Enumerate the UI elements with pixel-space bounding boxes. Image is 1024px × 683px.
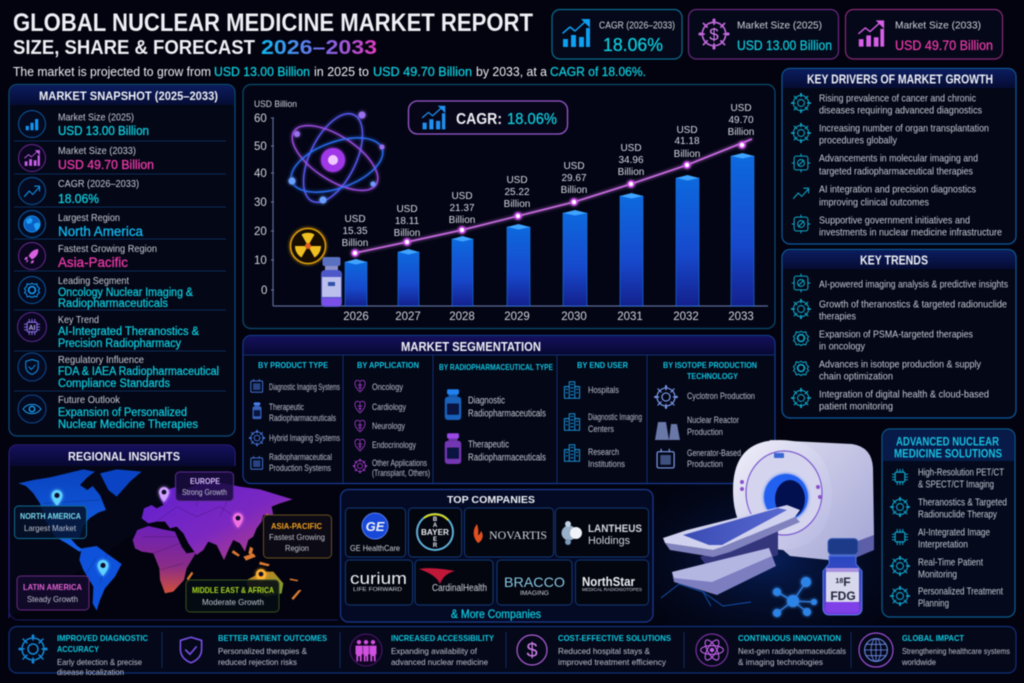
scanner base	[828, 535, 874, 566]
title block	[13, 9, 646, 79]
row: largest region: North America	[58, 224, 143, 239]
illustration: FDG vial: FDG	[830, 589, 856, 603]
main title: GLOBAL NUCLEAR MEDICINE MARKET REPORT	[13, 9, 533, 37]
row: future outlook	[18, 394, 198, 431]
bar caps	[345, 153, 754, 264]
label: Market Size (2033)	[895, 20, 981, 32]
list text: Integration of digital health & cloud-based	[819, 388, 989, 400]
callout: middle east and africa: Moderate Growth	[202, 597, 264, 607]
data labels: USD	[344, 214, 366, 225]
column: by application: Other Applications	[372, 458, 427, 468]
column: by application: (Transplant, Others)	[372, 468, 430, 478]
data labels: 15.35	[342, 226, 368, 237]
value: 18.06%	[603, 35, 663, 55]
year labels: 2028	[449, 311, 475, 323]
benefit: improved diagnostic accuracy: ACCURACY	[57, 644, 99, 654]
y-axis title: USD Billion	[254, 99, 297, 110]
list text: & SPECT/CT Imaging	[918, 478, 994, 490]
data labels: USD	[676, 125, 698, 136]
column: by isotope production technology	[654, 360, 757, 469]
benefit: global impact: worldwide	[901, 657, 936, 667]
gantry face	[733, 440, 832, 550]
table rail	[665, 517, 800, 557]
logo: GE HealthCare	[346, 508, 406, 557]
row: largest region: Largest Region	[58, 212, 120, 224]
table top	[663, 505, 800, 550]
benefit: cost-effective solutions	[517, 633, 671, 667]
region: africa	[133, 526, 197, 593]
illustration: FDG vial	[823, 538, 862, 615]
logo: Lantheus Holdings: LANTHEUS	[588, 523, 642, 535]
column: by product type: Therapeutic	[269, 402, 304, 412]
benefit: continuous innovation: & imaging technologies	[738, 657, 823, 667]
column: by radiopharmaceutical type: Radiopharmaceuticals	[468, 452, 546, 464]
column: by product type: Radiopharmaceuticals	[269, 413, 336, 423]
callout: asia-pacific: ASIA-PACIFIC	[271, 521, 322, 531]
logo: NorthStar: MEDICAL RADIOISOTOPES	[582, 587, 642, 592]
benefit: improved diagnostic accuracy: Early detection & precise	[57, 657, 142, 667]
table foot	[672, 548, 776, 595]
list text: targeted radiopharmaceutical therapies	[819, 166, 973, 178]
panel: market snapshot	[9, 84, 235, 436]
column: by product type: Diagnostic Imaging Systems	[269, 382, 340, 392]
callout: latin america	[17, 576, 89, 610]
more companies: & More Companies	[451, 607, 541, 621]
data labels: Billion	[394, 228, 420, 239]
column: by application: Neurology	[372, 421, 405, 431]
list text: Expansion of PSMA-targeted therapies	[819, 328, 973, 340]
y axis: 30	[254, 197, 267, 209]
region: southeast asia and oceania	[187, 513, 302, 600]
heading: REGIONAL INSIGHTS	[68, 450, 180, 464]
column: by isotope production technology: Nuclear Reactor	[687, 415, 739, 425]
benefit: continuous innovation: Next-gen radiopharmaceuticals	[738, 646, 846, 656]
column: by isotope production technology: Cyclotron Production	[687, 391, 755, 401]
column: by end user: Diagnostic Imaging	[588, 412, 642, 422]
data labels	[342, 103, 754, 249]
logo: Bayer: E	[433, 537, 437, 543]
data labels: 29.67	[561, 173, 587, 184]
column: by isotope production technology: BY ISOTOPE PRODUCTION	[663, 360, 757, 370]
vial label: F	[843, 575, 851, 589]
illustration: radiation symbol	[290, 228, 326, 264]
value: 18.06%	[507, 111, 557, 128]
floor network	[661, 576, 751, 606]
icons	[791, 274, 811, 408]
column: by radiopharmaceutical type: BY RADIOPHARMACEUTICAL TYPE	[439, 362, 553, 372]
list text: Monitoring	[918, 568, 957, 580]
callout: europe: Strong Growth	[182, 487, 227, 497]
data labels: USD	[506, 175, 528, 186]
column: by application: BY APPLICATION	[357, 360, 419, 370]
list text: procedures globally	[819, 134, 898, 146]
callout: north america: NORTH AMERICA	[20, 511, 81, 521]
region: greenland	[100, 469, 142, 497]
list text	[819, 92, 1002, 238]
benefit: continuous innovation	[696, 633, 846, 667]
callout: asia-pacific: Fastest Growing	[269, 532, 325, 542]
data labels: Billion	[504, 199, 530, 210]
row: market size 2025	[18, 110, 149, 138]
data labels: USD	[396, 204, 418, 215]
benefit: better patient outcomes	[180, 633, 327, 667]
data labels: 21.37	[449, 203, 475, 214]
row: market size 2033	[18, 144, 154, 172]
row: market size 2025: Market Size (2025)	[58, 112, 134, 124]
illustration: atom	[282, 105, 390, 211]
list text: diseases requiring advanced diagnostics	[819, 104, 982, 116]
list text: patient monitoring	[819, 400, 893, 412]
row: leading segment	[18, 275, 193, 310]
callout: asia-pacific: Region	[285, 543, 309, 553]
year labels: 2026	[343, 311, 369, 323]
illustration: vial	[321, 257, 342, 307]
row: regulatory influence: Regulatory Influence	[58, 354, 144, 366]
column: by end user: Centers	[588, 424, 614, 434]
icons	[791, 93, 811, 233]
callout: latin america: LATIN AMERICA	[23, 582, 82, 592]
row: largest region	[18, 210, 143, 239]
list text: Advances in isotope production & supply	[819, 358, 982, 370]
logo: Bayer: R	[433, 543, 438, 549]
heading: ADVANCED NUCLEAR	[896, 436, 1000, 448]
stat card: market size 2033	[846, 10, 1002, 59]
logo: NorthStar	[576, 560, 648, 605]
benefit: improved diagnostic accuracy	[18, 633, 148, 677]
logo: Bracco: BRACCO	[504, 574, 565, 590]
list text: Interpretation	[918, 538, 968, 550]
heading: KEY DRIVERS OF MARKET GROWTH	[807, 72, 993, 86]
column: by product type: Hybrid Imaging Systems	[269, 433, 340, 443]
column: by application: Oncology	[372, 382, 403, 392]
row: regulatory influence: Compliance Standards	[58, 378, 170, 390]
year labels	[343, 311, 754, 323]
summary sentence	[13, 65, 646, 79]
benefit: global impact	[859, 633, 1010, 667]
benefit: cost-effective solutions: improved treatment efficiency	[558, 657, 667, 667]
summary sentence: USD 49.70 Billion	[373, 65, 472, 79]
row: fastest growing region: Asia-Pacific	[58, 255, 128, 270]
summary sentence: in 2025 to	[314, 65, 369, 79]
illustration: PET/CT scanner	[661, 440, 874, 606]
data labels: 25.22	[504, 187, 530, 198]
data labels: 49.70	[728, 115, 754, 126]
benefit: increased accessibility: advanced nuclear medicine	[391, 657, 488, 667]
panel: top companies	[340, 490, 653, 622]
logo: GE HealthCare: GE HealthCare	[350, 543, 400, 553]
row: future outlook: Nuclear Medicine Therapies	[58, 419, 198, 431]
row: key trend: AI	[28, 325, 36, 332]
icon: growth chart	[563, 19, 590, 47]
label: CAGR:	[456, 111, 502, 128]
heading: TOP COMPANIES	[447, 494, 535, 506]
callout: north america	[14, 506, 86, 538]
list text: Radionuclide Therapy	[918, 508, 998, 520]
callout: middle east and africa: MIDDLE EAST & AFRICA	[192, 585, 274, 595]
heading: KEY TRENDS	[860, 254, 928, 268]
column: by end user: Institutions	[588, 459, 625, 469]
row: CAGR	[18, 178, 139, 206]
logo: Curium: curium	[350, 569, 407, 588]
column: by application: Cardiology	[372, 402, 406, 412]
benefit: improved diagnostic accuracy: IMPROVED DIAGNOSTIC	[57, 633, 148, 643]
column: by product type	[249, 360, 340, 473]
callout: europe	[176, 472, 234, 501]
row: regulatory influence	[18, 353, 219, 390]
value: USD 49.70 Billion	[895, 37, 993, 53]
logo: Novartis: NOVARTIS	[489, 528, 547, 542]
column: by product type: Radiopharmaceutical	[269, 452, 332, 462]
column: by radiopharmaceutical type	[439, 362, 553, 464]
data labels: Billion	[674, 149, 700, 160]
benefit: global impact: GLOBAL IMPACT	[902, 633, 965, 643]
panel: market segmentation	[243, 336, 775, 484]
list text: improving clinical outcomes	[819, 196, 929, 208]
row: key trend: Precision Radiopharmacy	[58, 338, 181, 350]
column: by application	[353, 360, 430, 478]
value: USD 13.00 Billion	[737, 37, 832, 53]
benefit: increased accessibility: Expanding availability of	[391, 646, 478, 656]
panel: growth chart	[243, 84, 775, 328]
row: fastest growing region: Fastest Growing Region	[58, 243, 157, 255]
callout: middle east and africa	[186, 580, 279, 612]
subtitle: SIZE, SHARE & FORECAST	[13, 37, 255, 59]
table pedestal	[700, 528, 778, 578]
data labels: USD	[563, 161, 585, 172]
benefit: cost-effective solutions: COST-EFFECTIVE SOLUTIONS	[558, 633, 671, 643]
column: by isotope production technology: Production	[687, 459, 723, 469]
column: by isotope production technology: Generator-Based	[687, 448, 741, 458]
column: by radiopharmaceutical type: Radiopharmaceuticals	[468, 408, 546, 420]
data labels: 34.96	[618, 155, 644, 166]
data labels: Billion	[449, 215, 475, 226]
column: by end user: BY END USER	[577, 360, 628, 370]
column: by product type: BY PRODUCT TYPE	[258, 360, 328, 370]
bore	[764, 474, 808, 520]
icon: dollar coin: $	[709, 25, 719, 44]
row: market size 2033: USD 49.70 Billion	[58, 158, 154, 172]
region: eurasia	[142, 483, 293, 560]
benefit: increased accessibility: INCREASED ACCESSIBILITY	[391, 633, 494, 643]
y axis: 0	[261, 285, 267, 297]
column: by isotope production technology: Production	[687, 427, 723, 437]
benefit: cost-effective solutions: $	[526, 640, 538, 662]
row: CAGR: CAGR (2026–2033)	[58, 178, 139, 190]
data labels: USD	[730, 103, 752, 114]
logo: Bayer: A	[433, 523, 438, 529]
row: key trend: Key Trend	[58, 314, 99, 326]
list text	[819, 278, 1008, 412]
stat card: CAGR	[552, 10, 682, 59]
row: key trend	[18, 312, 199, 350]
icon: cooling towers	[655, 422, 680, 440]
benefit: cost-effective solutions: Reduced hospital stays &	[558, 646, 650, 656]
column: by isotope production technology: TECHNOLOGY	[687, 371, 738, 381]
year labels: 2029	[504, 311, 530, 323]
summary sentence: The market is projected to grow from	[13, 65, 211, 79]
benefit: increased accessibility	[350, 633, 494, 667]
data labels: 41.18	[674, 136, 700, 147]
y axis: 10	[254, 255, 267, 267]
region: south america	[79, 546, 122, 611]
panel: benefits strip	[9, 626, 1016, 677]
list text: Increasing number of organ transplantation	[819, 122, 989, 134]
panel: regional insights	[9, 445, 338, 620]
row: market size 2025: USD 13.00 Billion	[58, 124, 149, 138]
summary sentence: by 2033, at a	[476, 65, 547, 79]
logo: Cardinal Health: CardinalHealth	[432, 583, 487, 594]
benefit: improved diagnostic accuracy: disease localization	[57, 667, 124, 677]
logo: Curium: LIFE FORWARD	[353, 587, 402, 593]
vial label: 18	[835, 578, 843, 585]
logo: Cardinal Health	[415, 560, 493, 605]
list text: AI-Integrated Image	[918, 526, 990, 538]
y axis: 20	[254, 226, 267, 238]
list text: therapies	[819, 310, 856, 322]
year labels: 2032	[673, 311, 699, 323]
list text: AI integration and precision diagnostics	[819, 184, 976, 196]
data labels: Billion	[342, 238, 368, 249]
logo: NorthStar: NorthStar	[582, 574, 635, 589]
year labels: 2030	[561, 311, 587, 323]
y axis: 60	[254, 113, 267, 125]
logo: Bracco	[497, 560, 572, 605]
column: by end user	[564, 360, 642, 469]
logo: Bayer: BAYER	[421, 528, 449, 537]
panel: advanced nuclear medicine solutions: MEDICINE SOLUTIONS	[894, 448, 1002, 460]
year labels: 2031	[617, 311, 643, 323]
logo: Lantheus Holdings	[556, 508, 648, 557]
callout: north america: Largest Market	[24, 523, 77, 533]
list text: Supportive government initiatives and	[819, 214, 970, 226]
list text: Real-Time Patient	[918, 556, 983, 568]
row: leading segment: Oncology Nuclear Imaging &	[58, 287, 193, 299]
summary sentence: CAGR of 18.06%.	[550, 65, 646, 79]
row: regulatory influence: FDA & IAEA Radiopharmaceutical	[58, 366, 219, 378]
logo: Novartis	[464, 508, 554, 557]
benefit: better patient outcomes: BETTER PATIENT OUTCOMES	[218, 633, 327, 643]
subtitle years: 2026–2033	[261, 37, 377, 59]
year labels: 2033	[728, 311, 754, 323]
panel: advanced nuclear medicine solutions	[882, 429, 1015, 617]
trend line	[352, 139, 752, 256]
column: by radiopharmaceutical type: Therapeutic	[468, 440, 509, 450]
y axis	[254, 113, 768, 306]
year labels: 2027	[395, 311, 421, 323]
label: Market Size (2025)	[737, 20, 822, 32]
logo: Lantheus Holdings: Holdings	[588, 535, 630, 547]
row: CAGR: 18.06%	[58, 192, 99, 206]
icon: growth chart pink	[859, 20, 884, 47]
column: by radiopharmaceutical type: Diagnostic	[468, 396, 505, 406]
logo: Bayer	[408, 508, 462, 557]
table pad	[683, 508, 787, 545]
map pins	[52, 487, 266, 584]
region: north america	[18, 469, 106, 552]
column: by end user: Hospitals	[588, 385, 619, 395]
heading: MARKET SEGMENTATION	[401, 339, 541, 354]
row: leading segment: Leading Segment	[58, 275, 129, 287]
panel: key trends	[782, 250, 1016, 418]
callout: asia-pacific	[264, 515, 332, 558]
y axis: 50	[254, 141, 267, 153]
logo: Curium	[346, 560, 412, 605]
panel: key drivers	[782, 68, 1016, 244]
heading: MARKET SNAPSHOT (2025–2033)	[39, 91, 218, 103]
column: by product type: Production Systems	[269, 463, 331, 473]
logo: GE HealthCare: GE	[366, 519, 385, 534]
data labels: USD	[451, 191, 473, 202]
list text: Advancements in molecular imaging and	[819, 152, 978, 164]
list text	[918, 466, 1007, 610]
list text: Planning	[918, 598, 949, 610]
row: future outlook: Future Outlook	[58, 394, 121, 406]
benefit: better patient outcomes: reduced rejection risks	[218, 657, 297, 667]
callout: latin america: Steady Growth	[27, 594, 78, 604]
icons	[890, 469, 910, 606]
benefit: better patient outcomes: Personalized therapies &	[218, 646, 307, 656]
row: leading segment: Radiopharmaceuticals	[58, 298, 168, 310]
icon: growth	[423, 106, 445, 129]
row: market size 2033: Market Size (2033)	[58, 145, 136, 157]
data labels: 18.11	[395, 216, 420, 227]
illustration: molecule	[774, 578, 816, 616]
data labels: Billion	[618, 167, 644, 178]
data labels: USD	[620, 143, 642, 154]
data labels: Billion	[561, 185, 587, 196]
bars	[345, 156, 754, 306]
CAGR badge	[408, 101, 568, 134]
list text: chain optimization	[819, 370, 893, 382]
column: by application: Endocrinology	[372, 440, 416, 450]
row: key trend: AI-Integrated Theranostics &	[58, 326, 199, 338]
data labels: Billion	[728, 127, 754, 138]
callout: europe: EUROPE	[190, 476, 220, 486]
benefit: continuous innovation: CONTINUOUS INNOVATION	[738, 633, 841, 643]
stat card: market size 2025	[688, 10, 838, 59]
row: future outlook: Expansion of Personalized	[58, 407, 187, 419]
logo: Bracco: IMAGING	[520, 591, 549, 597]
row: fastest growing region	[18, 242, 157, 270]
y axis: 40	[254, 168, 267, 180]
icon: dollar coin	[699, 19, 729, 49]
display accents	[740, 480, 822, 499]
summary sentence: USD 13.00 Billion	[214, 65, 310, 79]
scanner body	[760, 440, 874, 561]
list text: in oncology	[819, 340, 866, 352]
world map	[18, 469, 302, 611]
column: by end user: Research	[588, 447, 619, 457]
logo: Bayer: B	[433, 517, 438, 523]
list text: Rising prevalence of cancer and chronic	[819, 92, 976, 104]
label: CAGR (2026–2033)	[599, 20, 675, 32]
